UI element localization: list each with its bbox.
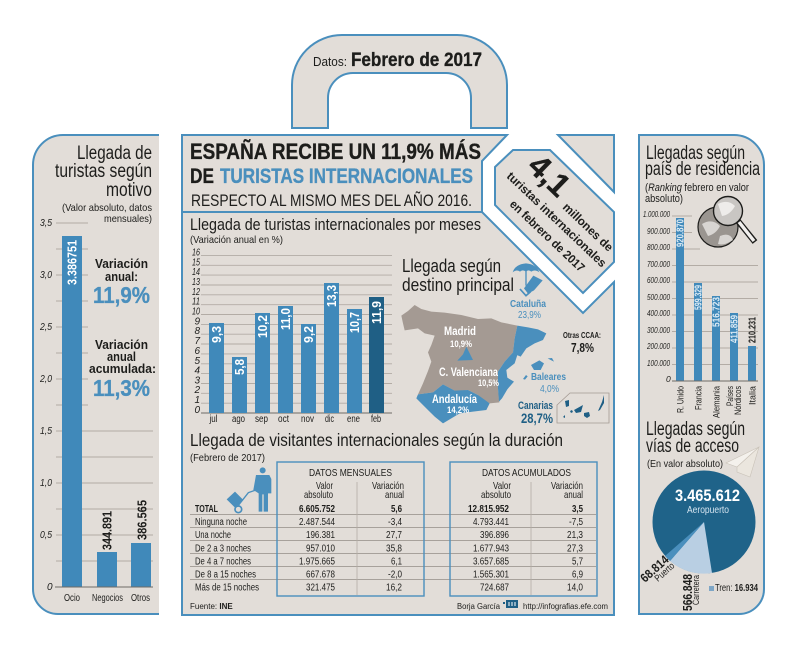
table row: total: 5,6 bbox=[391, 504, 402, 515]
map: Spain by destination bbox=[401, 305, 546, 423]
bar chart: purpose: 2,0 bbox=[39, 374, 52, 385]
table rows: nights: 957.010 bbox=[306, 544, 335, 554]
table rows: nights: 35,8 bbox=[386, 544, 402, 554]
table box: datos acumulados bbox=[450, 462, 597, 596]
table rows: nights: Ninguna noche bbox=[195, 517, 247, 528]
callout: cumulative variation: Variación bbox=[95, 337, 148, 352]
bar chart: country: Italia bbox=[748, 385, 758, 405]
bar chart: monthly variation: 9,3 bbox=[209, 326, 224, 343]
bar chart: monthly variation: 12 bbox=[192, 287, 200, 298]
bar chart: monthly variation: oct bbox=[278, 414, 289, 425]
bar chart: country: Alemania bbox=[712, 385, 722, 418]
panel: arrivals by country and access bbox=[638, 135, 764, 614]
bar chart: monthly variation: ago bbox=[232, 414, 245, 425]
table rows: nights: 4.793.441 bbox=[473, 517, 509, 528]
table rows: nights: 667.678 bbox=[306, 570, 335, 580]
icon: umbrella and lounger bbox=[513, 263, 543, 296]
table headers: DATOS ACUMULADOS bbox=[482, 467, 571, 479]
bar chart: purpose: 3,5 bbox=[40, 218, 52, 229]
heading: purpose: mensuales) bbox=[104, 213, 152, 225]
bar chart: country: 0 bbox=[666, 374, 671, 384]
bar chart: country: 210.231 bbox=[748, 317, 758, 343]
callout: 4,1 millones badge: 4,1 bbox=[521, 147, 578, 204]
bar chart: purpose: 0 bbox=[47, 582, 53, 593]
bar chart: purpose: 386.565 bbox=[134, 500, 150, 540]
heading: purpose: turistas según bbox=[55, 161, 152, 182]
table rows: nights: 396.896 bbox=[480, 530, 509, 541]
headline: RESPECTO AL MISMO MES DEL AÑO 2016. bbox=[191, 191, 472, 210]
callout: annual variation bbox=[93, 256, 150, 308]
panel: main content bbox=[182, 212, 614, 615]
heading: purpose bbox=[55, 143, 152, 225]
bar chart: monthly variation: nov bbox=[301, 414, 314, 425]
date label: Datos: bbox=[313, 54, 347, 69]
map labels: 23,9% bbox=[518, 310, 541, 321]
heading: duration table bbox=[190, 430, 563, 464]
icon: paper plane bbox=[726, 447, 759, 477]
pie chart: access routes: 3.465.612 bbox=[675, 486, 740, 505]
bar chart: monthly variation: 13,3 bbox=[324, 285, 339, 307]
bar chart: monthly variation: ene bbox=[347, 414, 360, 425]
bar chart: purpose: Ocio bbox=[64, 593, 80, 604]
bar chart: monthly variation: 6 bbox=[194, 346, 200, 357]
heading: duration table: Llegada de visitantes internacionales según la duración bbox=[190, 430, 563, 450]
table rows: nights: 6,9 bbox=[572, 570, 583, 580]
map labels: Canarias bbox=[518, 400, 553, 412]
map labels: Andalucía bbox=[432, 392, 477, 406]
bar chart: purpose: 1,0 bbox=[40, 478, 52, 489]
heading: access bbox=[646, 419, 745, 470]
map labels: Cataluña bbox=[510, 299, 546, 310]
bar chart: country: 516.723 bbox=[712, 297, 722, 327]
bar chart: monthly variation: 0 bbox=[194, 405, 200, 416]
table rows: nights: -7,5 bbox=[569, 517, 583, 528]
table: visitors by length of stay bbox=[190, 462, 597, 596]
callout: annual variation: 11,9% bbox=[93, 282, 150, 308]
heading: country: Llegadas según bbox=[646, 143, 745, 164]
bar chart: monthly variation: 11,0 bbox=[278, 308, 293, 330]
map: Canarias inset bbox=[557, 393, 609, 423]
footer: source and credits: Borja García bbox=[457, 602, 501, 611]
bar chart: purpose: 3.386751 bbox=[64, 240, 80, 285]
bar chart: country: 900.000 bbox=[647, 226, 670, 236]
table headers: Valor bbox=[316, 480, 333, 492]
pie chart: access routes: Aeropuerto bbox=[687, 504, 729, 516]
table rows: nights: De 4 a 7 noches bbox=[195, 556, 251, 568]
map labels: 14,2% bbox=[447, 405, 469, 415]
bar chart: monthly variation: feb bbox=[371, 414, 381, 425]
heading: access: (En valor absoluto) bbox=[647, 458, 723, 470]
callout: cumulative variation: anual bbox=[107, 349, 136, 364]
bar chart: monthly variation: sep bbox=[255, 414, 268, 425]
heading: country: absoluto) bbox=[645, 193, 683, 205]
icon: EFE logo bbox=[503, 600, 518, 608]
table rows: nights: 321.475 bbox=[306, 582, 335, 594]
bar chart: purpose bbox=[39, 218, 153, 604]
bar chart: monthly variation: 15 bbox=[192, 257, 200, 268]
bar chart: monthly variation: 9,2 bbox=[301, 326, 316, 343]
bar chart: monthly variation: 10,7 bbox=[347, 312, 362, 333]
table rows: nights: De 8 a 15 noches bbox=[195, 570, 256, 580]
headline: ESPAÑA RECIBE UN 11,9% MÁS bbox=[190, 139, 481, 164]
bar chart: monthly variation: 11,9 bbox=[369, 301, 384, 324]
bar chart: country: 200.000 bbox=[646, 341, 670, 351]
bar chart: country: Nórdicos bbox=[733, 386, 744, 415]
heading: purpose: (Valor absoluto, datos bbox=[62, 202, 152, 214]
heading: monthly chart: (Variación anual en %) bbox=[190, 234, 283, 246]
bar chart: purpose: 344.891 bbox=[100, 511, 114, 550]
bar chart: monthly variation: 5,8 bbox=[232, 359, 247, 375]
bar chart: monthly variation: 3 bbox=[194, 376, 200, 386]
map: Andalucía bbox=[416, 384, 490, 423]
bar chart: country: 400.000 bbox=[647, 308, 670, 318]
table row: total: TOTAL bbox=[195, 504, 218, 515]
bar chart: country bbox=[643, 209, 758, 418]
callout: 4,1 millones badge bbox=[495, 147, 616, 293]
bar chart: country: 599.329 bbox=[694, 285, 704, 310]
bar chart: monthly variation: dic bbox=[325, 414, 334, 425]
bar chart: monthly variation: 14 bbox=[192, 267, 200, 278]
table row: total: 12.815.952 bbox=[468, 504, 509, 515]
panel: headline box bbox=[182, 135, 507, 212]
heading: destination map bbox=[402, 256, 514, 295]
table rows: nights: Más de 15 noches bbox=[195, 582, 259, 594]
map labels: Otras CCAA: bbox=[563, 330, 601, 340]
table rows: nights: De 2 a 3 noches bbox=[195, 544, 251, 554]
bar chart: monthly variation: 7 bbox=[194, 336, 200, 347]
bar chart: country: 800.000 bbox=[647, 242, 670, 252]
table rows: nights: 1.677.943 bbox=[473, 544, 509, 554]
table rows: nights: 27,3 bbox=[567, 544, 583, 554]
heading: monthly chart: Llegada de turistas internacionales por meses bbox=[190, 215, 481, 234]
pie chart: access routes: 566.848 bbox=[681, 574, 695, 611]
bar chart: purpose: Otros bbox=[131, 593, 150, 604]
map labels: 7,8% bbox=[571, 340, 594, 355]
map labels bbox=[432, 299, 601, 426]
bar chart: country: 1.000.000 bbox=[643, 209, 670, 219]
footer: source and credits bbox=[190, 600, 608, 611]
table rows: nights: Una noche bbox=[195, 530, 231, 541]
heading: purpose: Llegada de bbox=[77, 143, 152, 164]
table rows: nights: 27,7 bbox=[386, 530, 402, 541]
bar chart: country: 411.859 bbox=[730, 315, 740, 343]
footer: source and credits: Fuente: INE bbox=[190, 602, 233, 611]
pie chart: access routes bbox=[638, 470, 758, 611]
bar chart: purpose: 3,0 bbox=[40, 270, 52, 281]
table headers bbox=[304, 467, 583, 501]
table headers: absoluto bbox=[481, 489, 511, 501]
map labels: 10,5% bbox=[478, 378, 499, 388]
bar chart: purpose: 1,5 bbox=[40, 426, 52, 437]
heading: country: (Ranking febrero en valor bbox=[645, 182, 749, 194]
pie chart: access routes: Tren: 16.934 bbox=[715, 583, 758, 594]
callout: 4,1 millones badge: turistas internacionales bbox=[504, 169, 610, 270]
bar chart: purpose: 0,5 bbox=[40, 530, 52, 541]
bar chart: country: Francia bbox=[694, 385, 704, 410]
bar chart: purpose: 2,5 bbox=[39, 322, 52, 333]
map labels: Madrid bbox=[444, 324, 476, 338]
table row: total: 3,5 bbox=[572, 504, 583, 515]
callout: 4,1 millones badge: millones de bbox=[560, 200, 616, 254]
map labels: 4,0% bbox=[540, 384, 559, 395]
bar chart: monthly variation: 16 bbox=[192, 247, 200, 258]
table rows: nights: 2.487.544 bbox=[299, 517, 335, 528]
table rows: nights: 1.565.301 bbox=[473, 570, 509, 580]
table headers: anual bbox=[564, 489, 583, 501]
panel: arrivals by purpose bbox=[33, 135, 159, 614]
bar chart: country: 100.000 bbox=[647, 358, 670, 368]
bar chart: monthly variation bbox=[192, 247, 392, 425]
pie chart: access routes: 68.814 bbox=[638, 553, 672, 585]
table rows: nights: 21,3 bbox=[567, 530, 583, 541]
callout: cumulative variation: acumulada: bbox=[89, 361, 156, 376]
headline bbox=[190, 139, 481, 210]
heading: purpose: motivo bbox=[106, 180, 152, 201]
heading: country: país de residencia bbox=[645, 159, 760, 180]
callout: annual variation: anual: bbox=[105, 269, 138, 284]
headline: TURISTAS INTERNACIONALES bbox=[220, 165, 473, 188]
table row: total: 6.605.752 bbox=[299, 504, 335, 515]
heading: destination map: destino principal bbox=[402, 275, 514, 295]
icon: traveller with luggage bbox=[227, 467, 271, 513]
bar chart: monthly variation: 10 bbox=[192, 306, 200, 318]
callout: cumulative variation: 11,3% bbox=[93, 375, 150, 401]
map: Madrid bbox=[457, 347, 473, 361]
table box: datos mensuales bbox=[277, 462, 424, 596]
icon: globe with magnifying glass bbox=[698, 196, 755, 247]
map: Baleares islands bbox=[523, 358, 554, 380]
headline: DE bbox=[190, 165, 214, 188]
heading: duration table: (Febrero de 2017) bbox=[190, 452, 265, 464]
table rows: nights bbox=[195, 517, 583, 594]
map labels: 28,7% bbox=[521, 410, 553, 426]
table rows: nights: 1.975.665 bbox=[299, 556, 335, 568]
bar chart: monthly variation: 9 bbox=[194, 316, 200, 327]
heading: monthly chart bbox=[190, 215, 481, 246]
callout: 4,1 millones badge: en febrero de 2017 bbox=[507, 197, 588, 275]
bar chart: country: 500.000 bbox=[647, 292, 670, 302]
bar chart: monthly variation: 1 bbox=[194, 395, 200, 406]
bar chart: country: 600.000 bbox=[647, 275, 670, 285]
bar chart: purpose: Negocios bbox=[92, 593, 123, 604]
bar chart: monthly variation: 11 bbox=[192, 297, 200, 308]
map: mainland grey regions bbox=[401, 305, 517, 403]
callout: cumulative variation bbox=[89, 337, 156, 401]
bar chart: monthly variation: 5 bbox=[194, 356, 200, 367]
heading: access: Llegadas según bbox=[646, 419, 745, 440]
table headers: Variación bbox=[551, 480, 583, 492]
bar chart: country: 920.870 bbox=[676, 219, 686, 247]
bar chart: monthly variation: 2 bbox=[193, 385, 200, 396]
panel: suitcase handle with date bbox=[292, 35, 507, 128]
table rows: nights: 5,7 bbox=[572, 556, 583, 568]
pie chart: access routes: Puerto bbox=[653, 561, 677, 584]
bar chart: monthly variation: 13 bbox=[192, 277, 200, 288]
table headers: absoluto bbox=[304, 489, 333, 501]
date label: Febrero de 2017 bbox=[351, 50, 482, 71]
map labels: C. Valenciana bbox=[439, 365, 498, 379]
table rows: nights: 16,2 bbox=[386, 582, 402, 594]
table rows: nights: 14,0 bbox=[567, 582, 583, 594]
callout: annual variation: Variación bbox=[95, 256, 148, 271]
table headers: DATOS MENSUALES bbox=[309, 467, 392, 479]
bar chart: monthly variation: 8 bbox=[194, 326, 200, 337]
bar chart: country: Países bbox=[725, 386, 736, 406]
map labels: 10,9% bbox=[450, 339, 472, 349]
bar chart: country: R. Unido bbox=[676, 386, 686, 413]
table headers: Valor bbox=[493, 480, 511, 492]
bar chart: monthly variation: 4 bbox=[194, 366, 200, 377]
bar chart: country: 300.000 bbox=[647, 325, 670, 335]
bar chart: country: 700.000 bbox=[647, 259, 670, 269]
map labels: Baleares bbox=[531, 371, 566, 383]
table row lines bbox=[190, 514, 596, 580]
bar chart: monthly variation: 10,2 bbox=[255, 315, 270, 338]
table headers: Variación bbox=[372, 480, 404, 492]
table rows: nights: 3.657.685 bbox=[473, 556, 509, 568]
table row: total bbox=[195, 504, 583, 515]
map: Cataluña bbox=[513, 326, 546, 357]
table rows: nights: 724.687 bbox=[480, 582, 509, 594]
footer: source and credits: http://infografias.efe.com bbox=[523, 602, 608, 611]
table rows: nights: -2,0 bbox=[388, 570, 402, 580]
table rows: nights: -3,4 bbox=[388, 517, 402, 528]
table rows: nights: 196.381 bbox=[306, 530, 335, 541]
heading: destination map: Llegada según bbox=[402, 256, 501, 276]
map: C. Valenciana bbox=[498, 352, 517, 402]
pie chart: access routes: Carretera bbox=[691, 574, 702, 605]
panel: top right corner triangle bbox=[558, 135, 614, 192]
table rows: nights: 6,1 bbox=[391, 556, 402, 568]
bar chart: monthly variation: jul bbox=[209, 414, 218, 425]
heading: country bbox=[645, 143, 760, 205]
heading: access: vías de acceso bbox=[646, 436, 739, 457]
table headers: anual bbox=[385, 489, 404, 501]
